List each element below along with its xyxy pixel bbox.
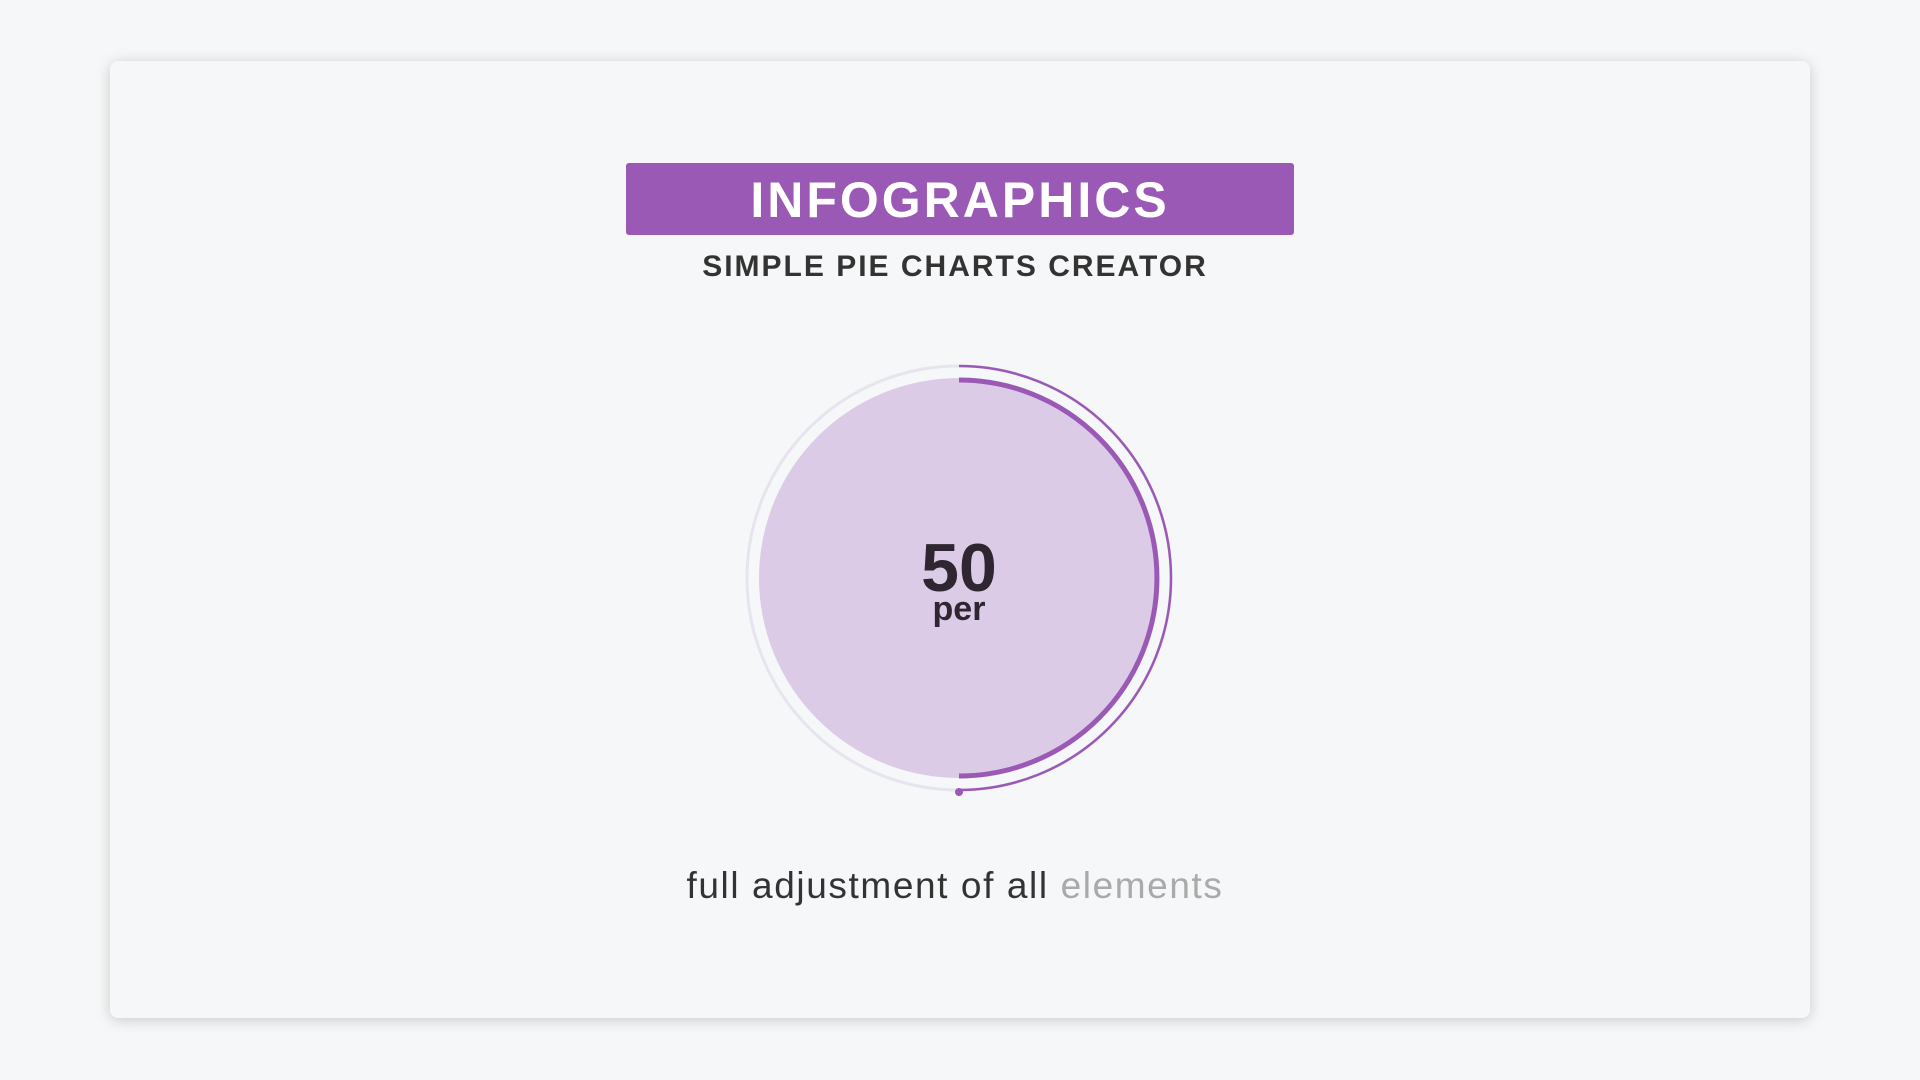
- panel: card: [110, 61, 1810, 1018]
- pie chart: 50: [921, 530, 997, 606]
- caption text: full adjustment of all elements: [686, 865, 1224, 906]
- pie chart: per: [933, 590, 985, 628]
- title: [626, 163, 1294, 235]
- subtitle: SIMPLE PIE CHARTS CREATOR: [702, 250, 1208, 283]
- title: INFOGRAPHICS: [750, 172, 1170, 228]
